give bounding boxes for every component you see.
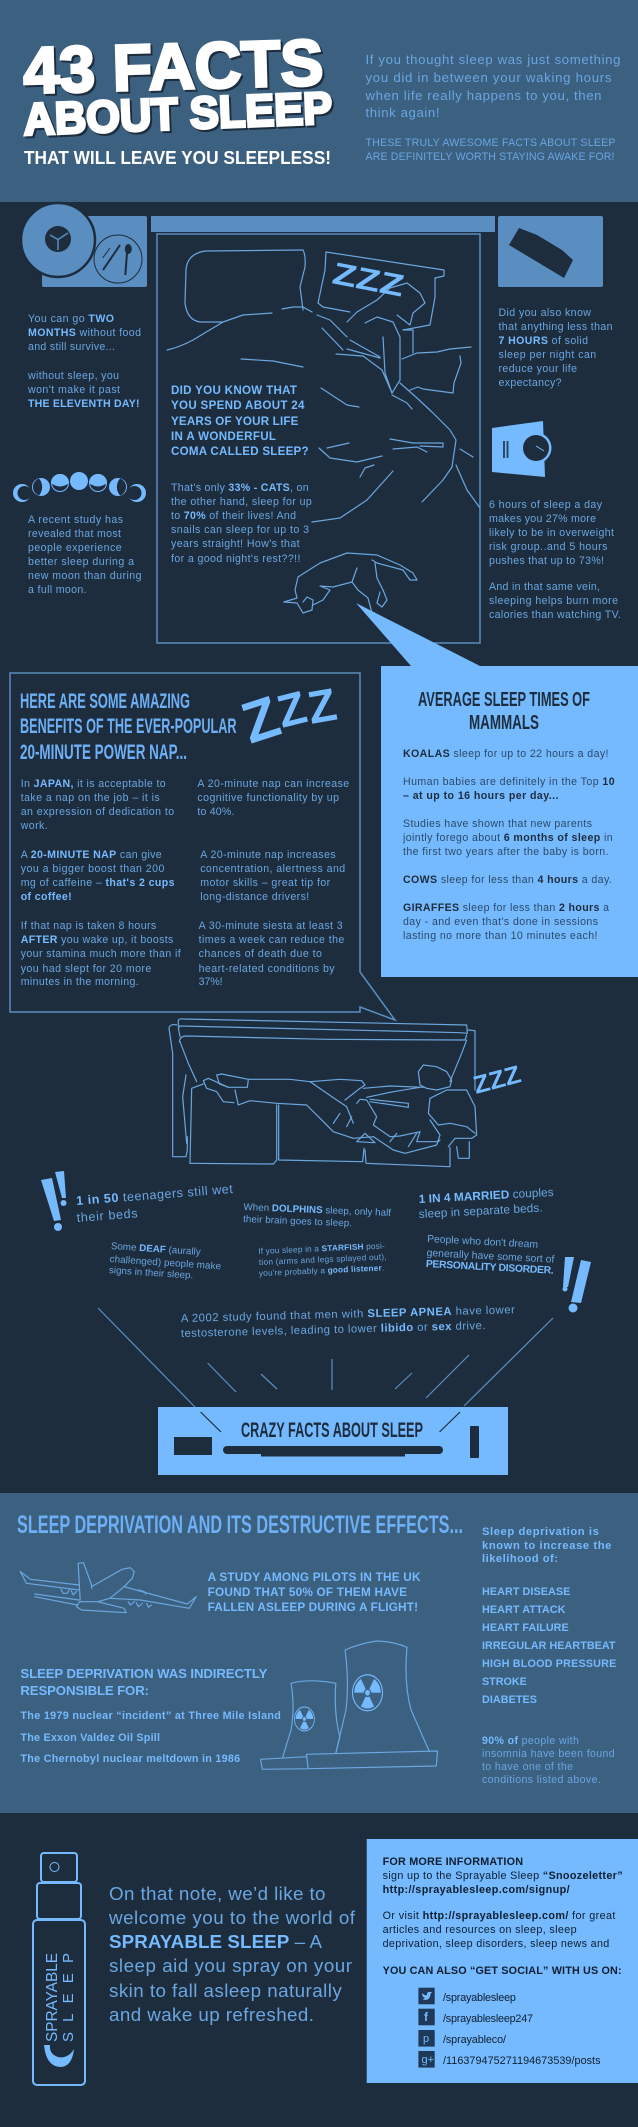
- text: seven hours: reduce your life: [498, 363, 577, 375]
- text: nap facts left column: work.: [20, 820, 48, 832]
- icon: exclamation marks left: [41, 1171, 66, 1231]
- text: increased likelihood list: known to increase the: [482, 1540, 611, 1552]
- fact: dolphins: their brain goes to sleep.: [243, 1214, 352, 1229]
- text: new moon study: new moon than during: [28, 570, 142, 582]
- icon: weighing scale: [492, 421, 552, 477]
- text: cats and snails: to 70% of their lives! And: [171, 510, 296, 522]
- text: nap facts left column: A 20-MINUTE NAP can give: [21, 849, 162, 861]
- text: pilots study: FOUND THAT 50% OF THEM HAVE: [208, 1585, 407, 1599]
- text: insomnia stat: conditions listed above.: [482, 1774, 601, 1786]
- text: information links: [383, 1856, 623, 1977]
- social: google plus: /116379475271194673539/posts: [443, 2055, 601, 2067]
- zzz: Z: [304, 678, 340, 734]
- text: welcome to sprayable sleep: skin to fall asleep naturally: [109, 1980, 342, 2001]
- icon: exclamation marks right: [562, 1257, 591, 1312]
- heading: [418, 689, 590, 734]
- text: nap facts right column: to 40%.: [197, 806, 234, 818]
- social: facebook: /sprayablesleep247: [443, 2013, 533, 2025]
- fact: dolphins: When DOLPHINS sleep, only half: [243, 1202, 391, 1219]
- intro text: [364, 52, 620, 163]
- text: six hours of sleep: risk group..and 5 hours: [489, 541, 607, 553]
- text: cats and snails: for a good night's rest??!!: [171, 553, 300, 565]
- text: nap facts right column: motor skills – great tip for: [200, 877, 331, 889]
- text: two months without food: MONTHS without food: [28, 327, 141, 339]
- text: pilots study: [208, 1570, 421, 1614]
- callout: did you know: IN A WONDERFUL: [171, 430, 276, 443]
- text: new moon study: a full moon.: [28, 584, 87, 596]
- text: two months without food: THE ELEVENTH DAY!: [28, 398, 140, 410]
- panel: crazy facts about sleep: CRAZY FACTS ABOUT SLEEP: [241, 1419, 423, 1442]
- text: mammal facts: [402, 748, 615, 942]
- text: welcome to sprayable sleep: [108, 1883, 356, 2025]
- text: seven hours: Did you also know: [498, 307, 591, 319]
- text: nap facts right column: 37%!: [199, 976, 223, 988]
- fact: teenagers: 1 in 50 teenagers still wet: [76, 1182, 234, 1208]
- title: ABOUT SLEEP: [24, 84, 335, 147]
- fact: deaf: signs in their sleep.: [109, 1265, 194, 1282]
- fact: sleep apnea: testosterone levels, leading to lower libido or sex drive.: [181, 1320, 486, 1340]
- social: facebook: f: [424, 2010, 429, 2024]
- text: welcome to sprayable sleep: SPRAYABLE SLEEP – A: [109, 1931, 322, 1952]
- title: 43 FACTS: [22, 26, 324, 107]
- text: cats and snails: snails can sleep for up to 3: [171, 524, 309, 536]
- fact: deaf: [109, 1241, 222, 1282]
- text: indirectly responsible: The 1979 nuclear “incident” at Three Mile Island: [20, 1710, 281, 1722]
- text: increased likelihood list: IRREGULAR HEARTBEAT: [482, 1640, 616, 1652]
- text: pilots study: FALLEN ASLEEP DURING A FLIGHT!: [208, 1600, 418, 1614]
- fact: sleep apnea: A 2002 study found that men with SLEEP APNEA have lower: [181, 1304, 515, 1325]
- social: pinterest: /sprayableco/: [443, 2034, 506, 2046]
- social: facebook: [418, 2009, 533, 2025]
- text: nap facts left column: of coffee!: [21, 891, 72, 903]
- intro text: ARE DEFINITELY WORTH STAYING AWAKE FOR!: [366, 151, 614, 163]
- icon: nuclear cooling towers: [260, 1641, 438, 1769]
- title: 43 FACTS: [24, 28, 326, 109]
- fact: married couples: 1 IN 4 MARRIED couples: [418, 1185, 554, 1206]
- text: nap facts left column: mg of caffeine – that's 2 cups: [21, 877, 175, 889]
- social: pinterest: [418, 2030, 506, 2047]
- text: insomnia stat: to have one of the: [482, 1761, 573, 1773]
- text: nap facts right column: A 30-minute siesta at least 3: [199, 920, 343, 932]
- text: increased likelihood list: [482, 1526, 616, 1706]
- fact: starfish: [258, 1240, 387, 1278]
- text: welcome to sprayable sleep: sleep aid you spray on your: [109, 1955, 352, 1976]
- text: information links: FOR MORE INFORMATION: [383, 1856, 523, 1868]
- text: two months without food: won't make it past: [27, 384, 120, 396]
- icon: spray bottle: [33, 1853, 85, 2085]
- panel: bed illustration: [157, 234, 480, 643]
- text: increased likelihood list: HEART ATTACK: [482, 1604, 566, 1616]
- social: pinterest: p: [423, 2033, 429, 2045]
- text: nap facts right column: times a week can reduce the: [199, 934, 344, 946]
- crazy facts text: [76, 1182, 555, 1340]
- text: nap facts right column: A 20-minute nap can increase: [197, 778, 349, 790]
- text: seven hours: 7 HOURS of solid: [498, 335, 588, 347]
- text: mammal facts: Human babies are definitely in the Top 10: [403, 776, 615, 788]
- text: six hours of sleep: makes you 27% more: [489, 513, 596, 525]
- text: six hours of sleep: 6 hours of sleep a day: [489, 499, 603, 511]
- heading: [20, 690, 236, 764]
- text: cats and snails: years straight! How's that: [171, 538, 300, 550]
- text: mammal facts: day - and even that's done in sessions: [403, 916, 598, 928]
- heading: HERE ARE SOME AMAZING: [20, 690, 190, 713]
- text: indirectly responsible: [20, 1666, 281, 1765]
- text: two months without food: [27, 313, 141, 410]
- panel: header: [0, 0, 638, 202]
- text: cats and snails: That's only 33% - CATS, on: [171, 482, 309, 494]
- text: nap facts left column: AFTER you wake up, it boosts: [21, 934, 173, 946]
- callout: did you know: YOU SPEND ABOUT 24: [171, 399, 305, 412]
- intro text: when life really happens to you, then: [364, 88, 602, 103]
- text: increased likelihood list: HIGH BLOOD PRESSURE: [482, 1658, 616, 1670]
- text: indirectly responsible: SLEEP DEPRIVATION WAS INDIRECTLY: [20, 1666, 268, 1681]
- text: nap facts left column: If that nap is taken 8 hours: [21, 920, 156, 932]
- text: welcome to sprayable sleep: and wake up refreshed.: [109, 2004, 314, 2025]
- fact: sleep apnea: [181, 1304, 515, 1340]
- text: increased likelihood list: STROKE: [482, 1676, 527, 1688]
- text: nap facts left column: you a bigger boost than 200: [21, 863, 164, 875]
- icon: plate panel: [21, 203, 147, 287]
- text: new moon study: better sleep during a: [28, 556, 134, 568]
- text: nap facts right column: concentration, alertness and: [200, 863, 345, 875]
- text: indirectly responsible: RESPONSIBLE FOR:: [20, 1683, 149, 1698]
- title: ABOUT SLEEP: [22, 82, 333, 145]
- text: insomnia stat: [482, 1735, 615, 1786]
- text: information links: sign up to the Sprayable Sleep “Snoozeletter”: [383, 1870, 623, 1882]
- fact: dolphins: [243, 1202, 391, 1229]
- text: pilots study: A STUDY AMONG PILOTS IN THE UK: [208, 1570, 421, 1584]
- text: new moon study: people experience: [28, 542, 122, 554]
- text: mammal facts: lasting no more than 10 minutes each!: [403, 930, 598, 942]
- text: increased likelihood list: Sleep deprivation is: [482, 1526, 599, 1538]
- heading: 20-MINUTE POWER NAP...: [20, 741, 187, 764]
- fact: starfish: tion (arms and legs splayed out),: [259, 1251, 387, 1267]
- text: nap facts left column: you had slept for 20 more: [21, 963, 151, 975]
- text: nap facts right column: A 20-minute nap increases: [200, 849, 336, 861]
- social: google plus: [418, 2051, 601, 2068]
- zzz: Z: [272, 680, 312, 738]
- intro text: If you thought sleep was just something: [366, 52, 620, 67]
- text: new moon study: revealed that most: [28, 528, 121, 540]
- text: welcome to sprayable sleep: On that note, we’d like to: [109, 1883, 326, 1904]
- text: two months without food: You can go TWO: [28, 313, 114, 325]
- text: six hours of sleep: [489, 499, 621, 621]
- illustration: sleeping cat: [284, 553, 417, 613]
- text: seven hours: that anything less than: [498, 321, 613, 333]
- callout: did you know: DID YOU KNOW THAT: [171, 384, 297, 397]
- social: twitter: /sprayablesleep: [443, 1992, 516, 2004]
- icon: alarm panel: [498, 216, 603, 287]
- text: nap facts left column: minutes in the morning.: [21, 976, 139, 988]
- text: mammal facts: Studies have shown that new parents: [403, 818, 592, 830]
- text: information links: deprivation, sleep disorders, sleep news and: [383, 1938, 609, 1950]
- icon: airplane: [20, 1563, 196, 1613]
- text: information links: Or visit http://sprayablesleep.com/ for great: [383, 1910, 615, 1922]
- heading: BENEFITS OF THE EVER-POPULAR: [20, 715, 236, 738]
- illustration: sleeping person: [167, 250, 480, 522]
- text: nap facts right column: cognitive functionality by up: [197, 792, 339, 804]
- panel: average sleep times of mammals: [356, 603, 638, 977]
- panel: crazy facts about sleep: [98, 1308, 553, 1475]
- zzz: ZZZ: [330, 256, 407, 304]
- fact: personality disorder: People who don't dream: [427, 1234, 538, 1251]
- text: seven hours: [498, 307, 613, 389]
- text: six hours of sleep: pushes that up to 73%!: [489, 555, 604, 567]
- fact: married couples: sleep in separate beds.: [418, 1201, 543, 1221]
- fact: personality disorder: PERSONALITY DISORDER.: [426, 1259, 554, 1277]
- text: insomnia stat: insomnia have been found: [482, 1748, 615, 1760]
- text: information links: http://sprayablesleep.com/signup/: [383, 1884, 570, 1896]
- text: mammal facts: the first two years after the baby is born.: [403, 846, 608, 858]
- panel: sleep deprivation: [0, 1493, 638, 1813]
- text: six hours of sleep: calories than watching TV.: [489, 609, 621, 621]
- text: seven hours: sleep per night can: [498, 349, 596, 361]
- text: cats and snails: [171, 482, 312, 565]
- title: [22, 26, 335, 168]
- intro text: think again!: [366, 105, 440, 120]
- social: google plus: g+: [422, 2054, 434, 2066]
- zzz: Z: [234, 684, 288, 756]
- text: increased likelihood list: DIABETES: [482, 1694, 537, 1706]
- text: indirectly responsible: The Chernobyl nuclear meltdown in 1986: [20, 1753, 240, 1765]
- heading: MAMMALS: [469, 712, 539, 734]
- text: indirectly responsible: The Exxon Valdez Oil Spill: [20, 1732, 160, 1744]
- text: nap facts left column: your stamina much more than if: [21, 948, 181, 960]
- text: new moon study: A recent study has: [28, 514, 123, 526]
- text: nap facts right column: [197, 778, 349, 988]
- panel: more information: [367, 1839, 638, 2083]
- fact: personality disorder: [426, 1234, 555, 1277]
- callout: did you know: COMA CALLED SLEEP?: [171, 445, 309, 458]
- text: six hours of sleep: sleeping helps burn more: [489, 595, 618, 607]
- zzz: ZZZ: [470, 1060, 524, 1100]
- icon: spray bottle: SLEEP: [60, 1953, 77, 2042]
- text: cats and snails: the other hand, sleep for up: [171, 496, 312, 508]
- fact: deaf: Some DEAF (aurally: [111, 1241, 201, 1258]
- text: nap facts right column: chances of death due to: [199, 948, 322, 960]
- fact: starfish: you're probably a good listener.: [259, 1263, 384, 1278]
- text: new moon study: [28, 514, 142, 596]
- text: increased likelihood list: HEART DISEASE: [482, 1586, 570, 1598]
- title: THAT WILL LEAVE YOU SLEEPLESS!: [24, 148, 331, 168]
- text: mammal facts: jointly forego about 6 months of sleep in: [402, 832, 613, 844]
- text: six hours of sleep: And in that same vein,: [489, 581, 600, 593]
- text: information links: articles and resources on sleep, sleep: [383, 1924, 577, 1936]
- zzz: [234, 678, 340, 756]
- text: two months without food: without sleep, you: [27, 370, 119, 382]
- fact: teenagers: their beds: [76, 1206, 138, 1225]
- text: mammal facts: – at up to 16 hours per day...: [403, 790, 559, 802]
- text: nap facts right column: heart-related conditions by: [199, 963, 335, 975]
- text: seven hours: expectancy?: [498, 377, 562, 389]
- fact: married couples: [418, 1185, 554, 1221]
- text: mammal facts: GIRAFFES sleep for less than 2 hours a: [403, 902, 609, 914]
- callout: did you know: [171, 384, 309, 458]
- text: insomnia stat: 90% of people with: [482, 1735, 579, 1747]
- intro text: THESE TRULY AWESOME FACTS ABOUT SLEEP: [366, 137, 616, 149]
- text: nap facts left column: In JAPAN, it is acceptable to: [21, 778, 166, 790]
- icon: spray bottle: SPRAYABLE: [44, 1953, 61, 2042]
- text: six hours of sleep: likely to be in overweight: [489, 527, 614, 539]
- text: welcome to sprayable sleep: welcome you to the world of: [108, 1907, 356, 1928]
- text: nap facts left column: an expression of dedication to: [21, 806, 174, 818]
- text: increased likelihood list: likelihood of:: [482, 1553, 558, 1565]
- illustration: man napping on couch: [169, 1019, 524, 1167]
- text: two months without food: and still survive...: [28, 341, 115, 353]
- social: twitter: [418, 1988, 516, 2004]
- icon: moon phases: [13, 472, 146, 502]
- panel: power nap benefits: [10, 673, 395, 1020]
- text: nap facts left column: take a nap on the job – it is: [21, 792, 160, 804]
- text: nap facts left column: [20, 778, 181, 988]
- callout: did you know: YEARS OF YOUR LIFE: [171, 415, 299, 428]
- text: increased likelihood list: HEART FAILURE: [482, 1622, 569, 1634]
- intro text: you did in between your waking hours: [366, 70, 612, 85]
- headboard bar: [151, 216, 495, 232]
- text: information links: YOU CAN ALSO “GET SOCIAL” WITH US ON:: [383, 1965, 622, 1977]
- text: nap facts right column: long-distance drivers!: [200, 891, 309, 903]
- text: mammal facts: COWS sleep for less than 4 hours a day.: [403, 874, 612, 886]
- fact: teenagers: [76, 1182, 234, 1225]
- fact: starfish: If you sleep in a STARFISH posi-: [258, 1240, 385, 1256]
- fact: personality disorder: generally have some sort of: [426, 1248, 555, 1266]
- fact: deaf: challenged) people make: [109, 1254, 222, 1272]
- text: mammal facts: KOALAS sleep for up to 22 hours a day!: [403, 748, 608, 760]
